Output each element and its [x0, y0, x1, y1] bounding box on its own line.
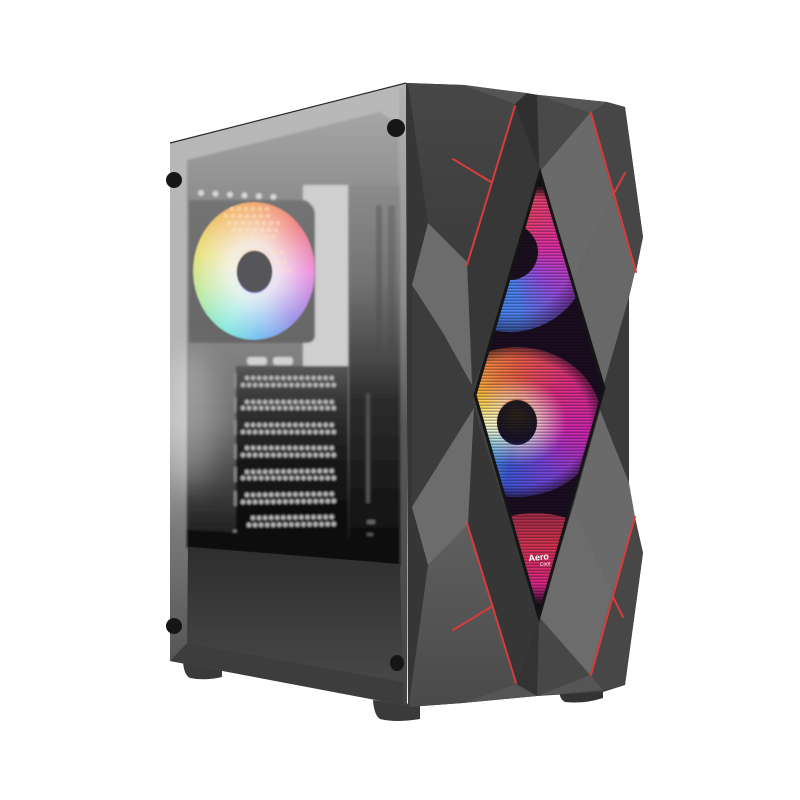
- glass top edge: [170, 83, 406, 143]
- PCIe slot plate: [233, 366, 348, 538]
- upper-right dark facet: [590, 102, 643, 272]
- bottom tip shade: [532, 586, 546, 612]
- lower right column: [349, 400, 400, 555]
- upper fan hub: [510, 228, 538, 280]
- screws: [166, 119, 405, 671]
- side glass panel: [164, 83, 407, 706]
- expansion slots tabs: [247, 357, 293, 365]
- mid-right dark strip: [600, 297, 629, 483]
- chassis floor: [187, 530, 400, 566]
- chassis interior: [187, 112, 400, 566]
- side fan hub: [237, 251, 272, 292]
- left haze: [164, 350, 216, 490]
- front mesh window with RGB fans: [476, 178, 602, 612]
- lower base band: [170, 643, 404, 705]
- lower-right center light facet: [539, 507, 613, 675]
- fan bracket: [189, 200, 315, 343]
- mid-left dark facet: [412, 285, 474, 507]
- mesh lines: [476, 188, 598, 604]
- top tip shade: [534, 178, 546, 198]
- right column stripes: [376, 205, 395, 355]
- glass frame: [170, 83, 407, 706]
- brand logo: [528, 551, 550, 568]
- lower-left light facet: [412, 408, 474, 565]
- upper-left dark facet: [408, 83, 515, 262]
- upper right column: [349, 185, 400, 400]
- case feet: [183, 662, 603, 721]
- PSU vent stripe and socket: [366, 393, 375, 536]
- front panel: [406, 83, 643, 707]
- middle fan hub: [497, 400, 537, 445]
- central dark facet upper: [467, 104, 539, 388]
- upper-right light facet: [540, 113, 613, 282]
- central dark facet lower: [468, 408, 539, 684]
- lower-left big facet: [409, 524, 516, 707]
- front fan middle: [476, 347, 598, 497]
- left edge strip: [406, 83, 428, 707]
- side RGB fan: [193, 202, 315, 340]
- red accent lines: [453, 106, 636, 683]
- brand logo: Aero: [528, 551, 549, 563]
- front silhouette: [406, 83, 643, 707]
- top wedges: [463, 85, 607, 170]
- front fan upper: [496, 186, 576, 332]
- front fan lower: [512, 513, 566, 604]
- brand logo: Cool: [540, 561, 550, 568]
- rear exhaust holes: [201, 193, 275, 197]
- PSU shroud: [187, 547, 403, 682]
- right light facet: [573, 195, 635, 388]
- upper-left light facet: [412, 223, 472, 385]
- rear vertical bar: [303, 185, 348, 368]
- glass right edge strip: [399, 85, 407, 705]
- lower-right light facet: [573, 410, 635, 592]
- lower-right dark facet: [590, 517, 643, 690]
- bottom wedges: [463, 617, 603, 703]
